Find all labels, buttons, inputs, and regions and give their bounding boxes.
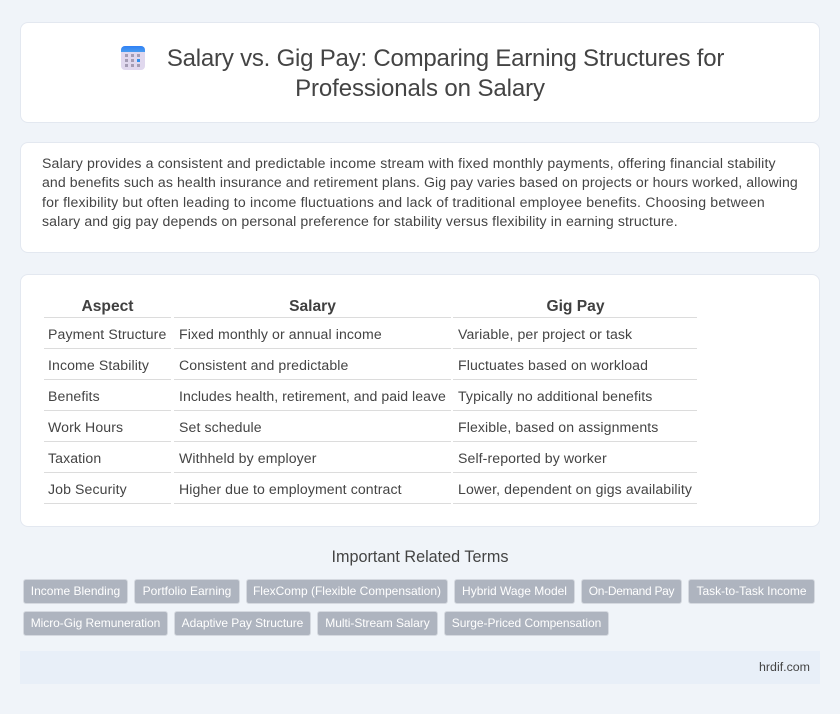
header card: [20, 22, 820, 123]
comparison table: [44, 298, 697, 504]
related terms tags: On-Demand Pay: [589, 584, 674, 598]
title: [167, 45, 724, 102]
comparison table: Payment Structure: [48, 326, 166, 342]
description panel: [20, 142, 820, 253]
related terms tags: Surge-Priced Compensation: [452, 616, 601, 630]
description text: and benefits such as health insurance and retirement plans. Gig pay varies based on projects or hours worked, allowing: [42, 174, 798, 190]
comparison table: Includes health, retirement, and paid leave: [179, 388, 446, 404]
comparison table: Salary: [289, 298, 336, 315]
related terms tags: FlexComp (Flexible Compensation): [253, 584, 441, 598]
related terms tags: Hybrid Wage Model: [462, 584, 567, 598]
comparison table: Variable, per project or task: [458, 326, 632, 342]
related terms tags: Micro-Gig Remuneration: [31, 616, 160, 630]
related terms tags: Portfolio Earning: [143, 584, 231, 598]
icon: calendar: [121, 46, 145, 70]
comparison table: Lower, dependent on gigs availability: [458, 481, 692, 497]
comparison table: Typically no additional benefits: [458, 388, 652, 404]
comparison table: Set schedule: [179, 419, 262, 435]
comparison table: Self-reported by worker: [458, 450, 607, 466]
related terms tags: Multi-Stream Salary: [325, 616, 430, 630]
related terms tags: Adaptive Pay Structure: [182, 616, 303, 630]
title: Salary vs. Gig Pay: Comparing Earning Structures for: [167, 45, 724, 72]
description text: [42, 155, 798, 229]
description text: salary and gig pay depends on personal preference for stability versus flexibility in earning structure.: [42, 213, 678, 229]
title: Professionals on Salary: [295, 75, 545, 102]
comparison table: Work Hours: [48, 419, 123, 435]
comparison table: Consistent and predictable: [179, 357, 348, 373]
related terms tags: Income Blending: [31, 584, 120, 598]
related terms tags: Task-to-Task Income: [696, 584, 807, 598]
comparison table: Fluctuates based on workload: [458, 357, 648, 373]
description text: for flexibility but often leading to income fluctuations and lack of traditional employee benefits. Choosing between: [42, 194, 765, 210]
comparison table: Taxation: [48, 450, 101, 466]
related terms heading: Important Related Terms: [332, 548, 508, 566]
comparison table: Aspect: [82, 298, 134, 315]
footer bar: [20, 651, 820, 684]
comparison table: Job Security: [48, 481, 127, 497]
comparison table: Income Stability: [48, 357, 149, 373]
comparison table: Flexible, based on assignments: [458, 419, 658, 435]
footer source: hrdif.com: [759, 660, 810, 674]
description text: Salary provides a consistent and predictable income stream with fixed monthly payments, offering financial stability: [42, 155, 776, 171]
table panel: [20, 274, 820, 527]
comparison table: Gig Pay: [546, 298, 605, 315]
comparison table: Withheld by employer: [179, 450, 317, 466]
comparison table: Benefits: [48, 388, 100, 404]
comparison table: Fixed monthly or annual income: [179, 326, 382, 342]
comparison table: Higher due to employment contract: [179, 481, 402, 497]
related terms tags: [23, 579, 815, 636]
